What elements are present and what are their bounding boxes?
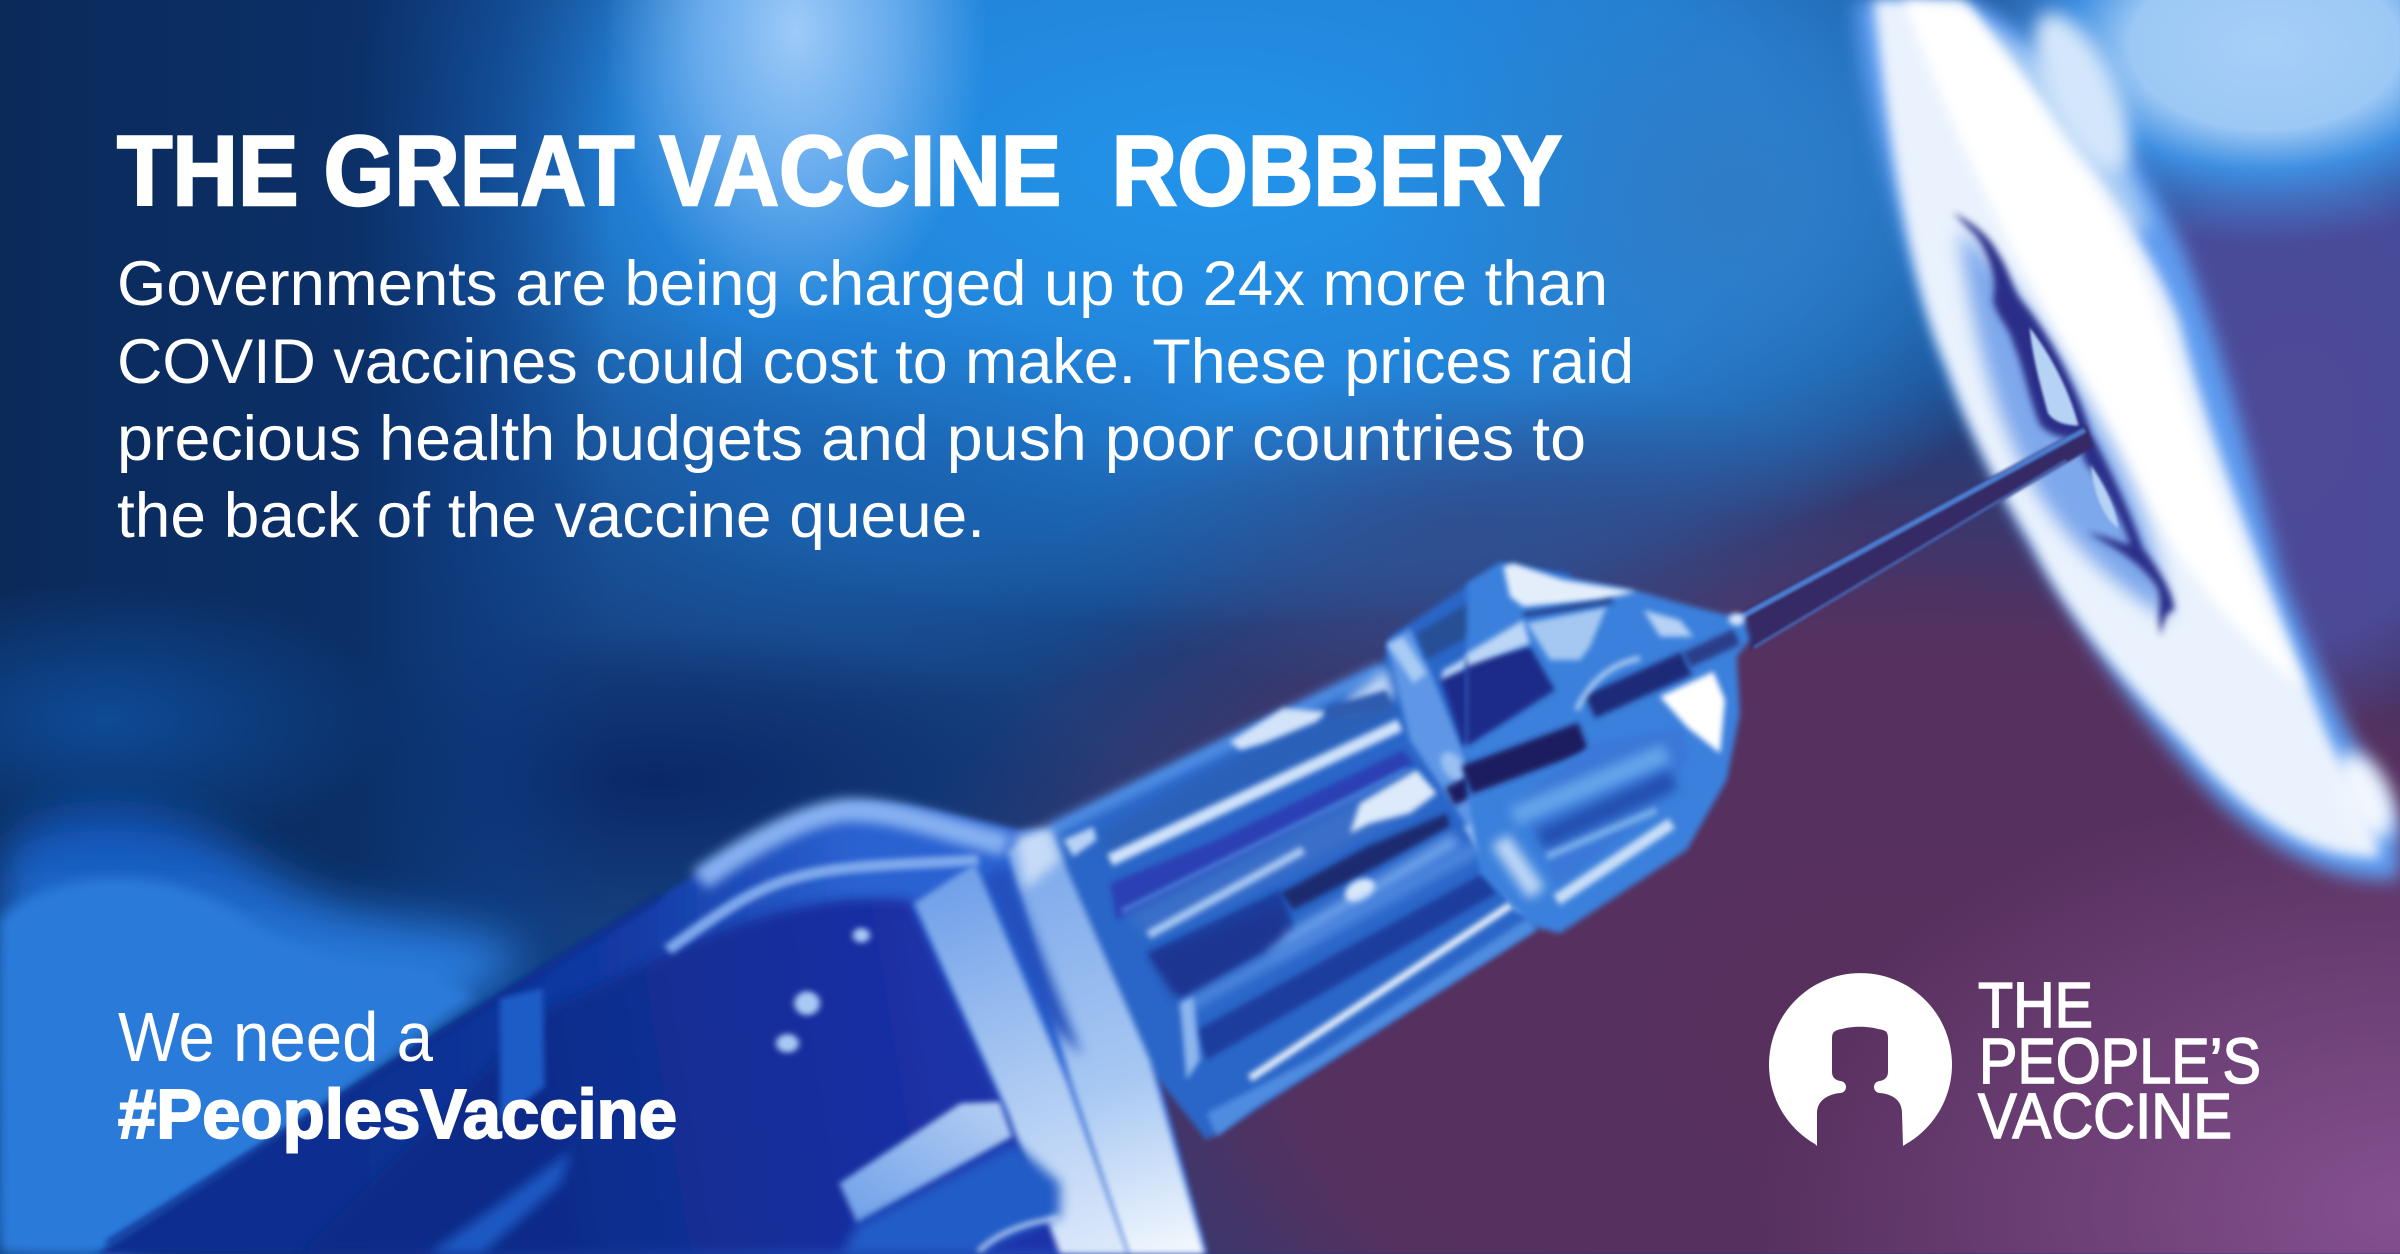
vial highlight: [2015, 0, 2148, 184]
body text: precious health budgets and push poor countries to: [117, 404, 1586, 474]
photo: syringe glass dome and tip: [1467, 563, 1750, 933]
bottom vial ring: [979, 1218, 1060, 1252]
logo wordmark: VACCINE: [1978, 1080, 2232, 1152]
dome inner glass: [1513, 727, 1690, 887]
barrel edge shadow: [107, 897, 661, 1243]
lower-left blue blob: [0, 808, 528, 1254]
body text: [117, 249, 1634, 551]
title: THE GREAT VACCINE ROBBERY: [117, 115, 1562, 226]
hub upper glass: [1100, 687, 1397, 857]
photo: barrel shoulder and reflections: [839, 827, 1205, 1254]
logo wordmark: [1978, 969, 2261, 1152]
barrel reflection shard: [839, 1102, 1012, 1223]
hub collar: [1387, 628, 1533, 917]
photo: vaccine vial stopper: [1855, 0, 2400, 879]
hub bright band: [1110, 725, 1400, 860]
barrel top highlight: [668, 860, 979, 950]
hub upper box: [1417, 587, 1510, 660]
call to action: hashtag: #PeoplesVaccine: [118, 1075, 677, 1153]
hub dark bands: [1280, 813, 1450, 910]
body text: COVID vaccines could cost to make. These prices raid: [117, 327, 1634, 397]
photo: syringe barrel base: [96, 803, 1207, 1254]
logo wordmark: PEOPLE’S: [1979, 1025, 2261, 1097]
hub blue interior: [1110, 750, 1413, 920]
hub dark spot group: [1150, 907, 1283, 1000]
puncture mark: [1953, 213, 2174, 637]
barrel inner reflection strip: [500, 988, 545, 1120]
photo: syringe needle: [1730, 426, 2094, 649]
body text: Governments are being charged up to 24x more than: [117, 249, 1608, 319]
logo wordmark: THE: [1978, 969, 2093, 1041]
photo: syringe hub body: [1033, 563, 1570, 1140]
air bubbles: [776, 928, 870, 1053]
logo icon: circle with person silhouette: [1769, 973, 1952, 1146]
call to action: we need a: We need a: [118, 998, 433, 1076]
hub white patches: [1350, 770, 1437, 833]
logo: The People's Vaccine: [1769, 969, 2261, 1152]
body text: the back of the vaccine queue.: [117, 481, 985, 551]
